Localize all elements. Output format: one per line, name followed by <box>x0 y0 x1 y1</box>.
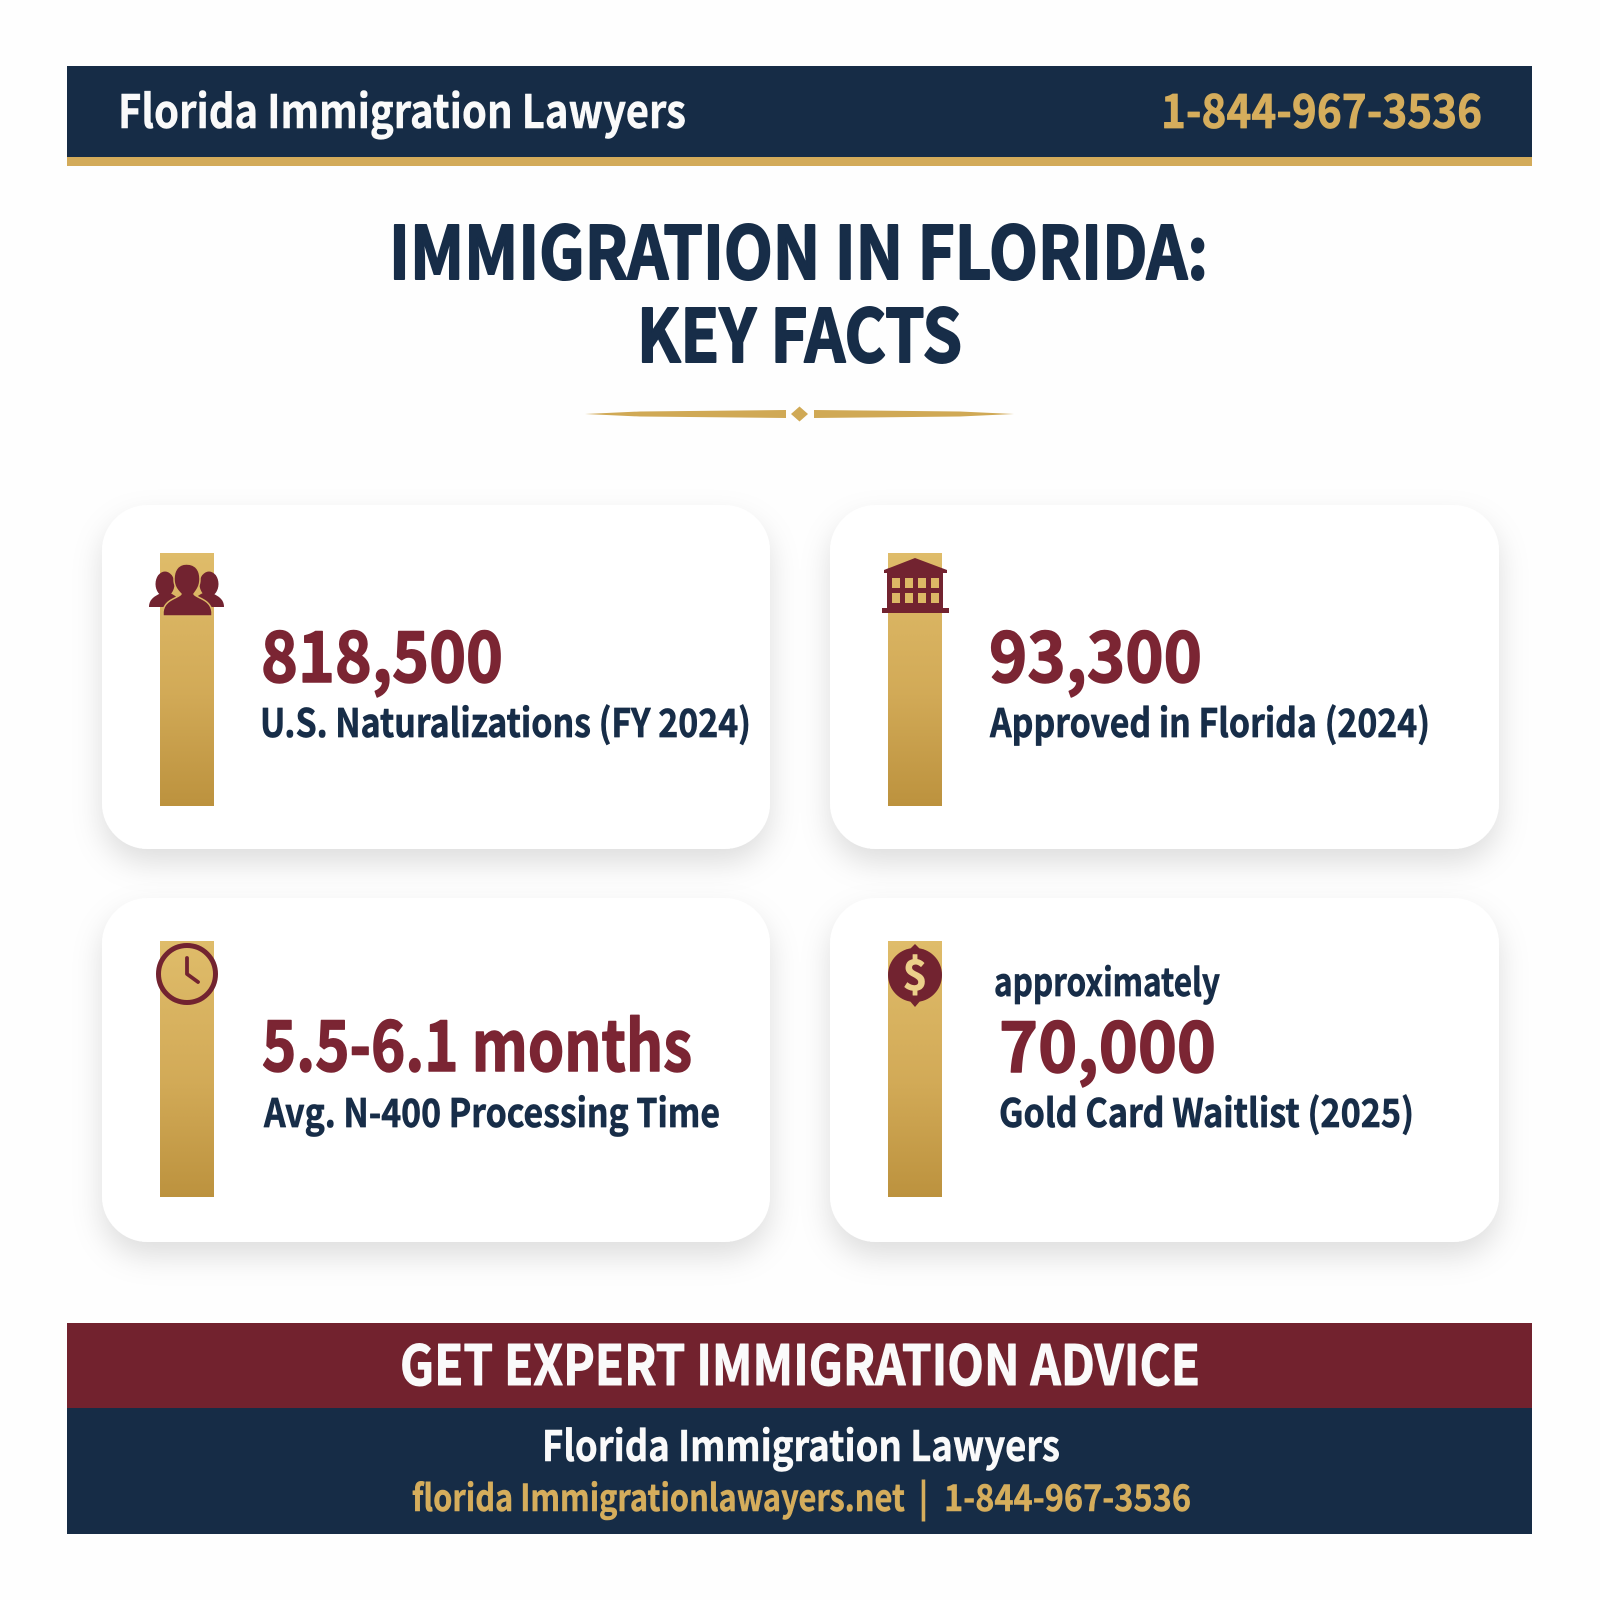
gold bar <box>160 553 214 806</box>
statistic label: U.S. Naturalizations (FY 2024) <box>260 693 751 749</box>
statistic value: 818,500 <box>261 602 503 703</box>
footer firm name: Florida Immigration Lawyers <box>542 1413 1060 1474</box>
icon: government building <box>882 558 949 613</box>
panel: U.S. naturalizations <box>102 505 770 849</box>
header phone number: 1-844-967-3536 <box>1161 73 1482 142</box>
header banner <box>67 66 1532 166</box>
gold bar <box>160 941 214 1197</box>
footer website and phone: | <box>918 1468 929 1522</box>
panel: N-400 processing time <box>102 898 770 1242</box>
title <box>389 195 1208 384</box>
icon: clock <box>158 946 216 1002</box>
gold bar <box>888 941 942 1197</box>
contact footer <box>67 1408 1532 1534</box>
statistic label: Approved in Florida (2024) <box>989 693 1430 749</box>
icon: dollar badge <box>888 942 942 1007</box>
footer website and phone: 1-844-967-3536 <box>944 1468 1191 1522</box>
statistic label: Avg. N-400 Processing Time <box>263 1083 720 1139</box>
gold bar <box>888 553 942 806</box>
panel: gold card waitlist <box>830 898 1499 1242</box>
footer website and phone: florida Immigrationlawayers.net <box>412 1468 905 1522</box>
statistic label: Gold Card Waitlist (2025) <box>999 1083 1414 1139</box>
qualifier text: approximately <box>994 952 1220 1007</box>
header firm name: Florida Immigration Lawyers <box>118 76 686 142</box>
call-to-action banner <box>67 1321 1532 1408</box>
statistic value: 5.5-6.1 months <box>262 991 692 1092</box>
title divider ornament <box>585 406 1014 422</box>
statistic value: 93,300 <box>989 602 1202 703</box>
title: IMMIGRATION IN FLORIDA: <box>389 195 1208 301</box>
icon: dollar badge: $ <box>903 942 927 1003</box>
statistic value: 70,000 <box>999 992 1216 1093</box>
panel: approved in Florida <box>830 505 1499 849</box>
icon: group of people <box>149 564 224 616</box>
title: KEY FACTS <box>637 278 962 384</box>
call-to-action heading: GET EXPERT IMMIGRATION ADVICE <box>400 1321 1200 1401</box>
